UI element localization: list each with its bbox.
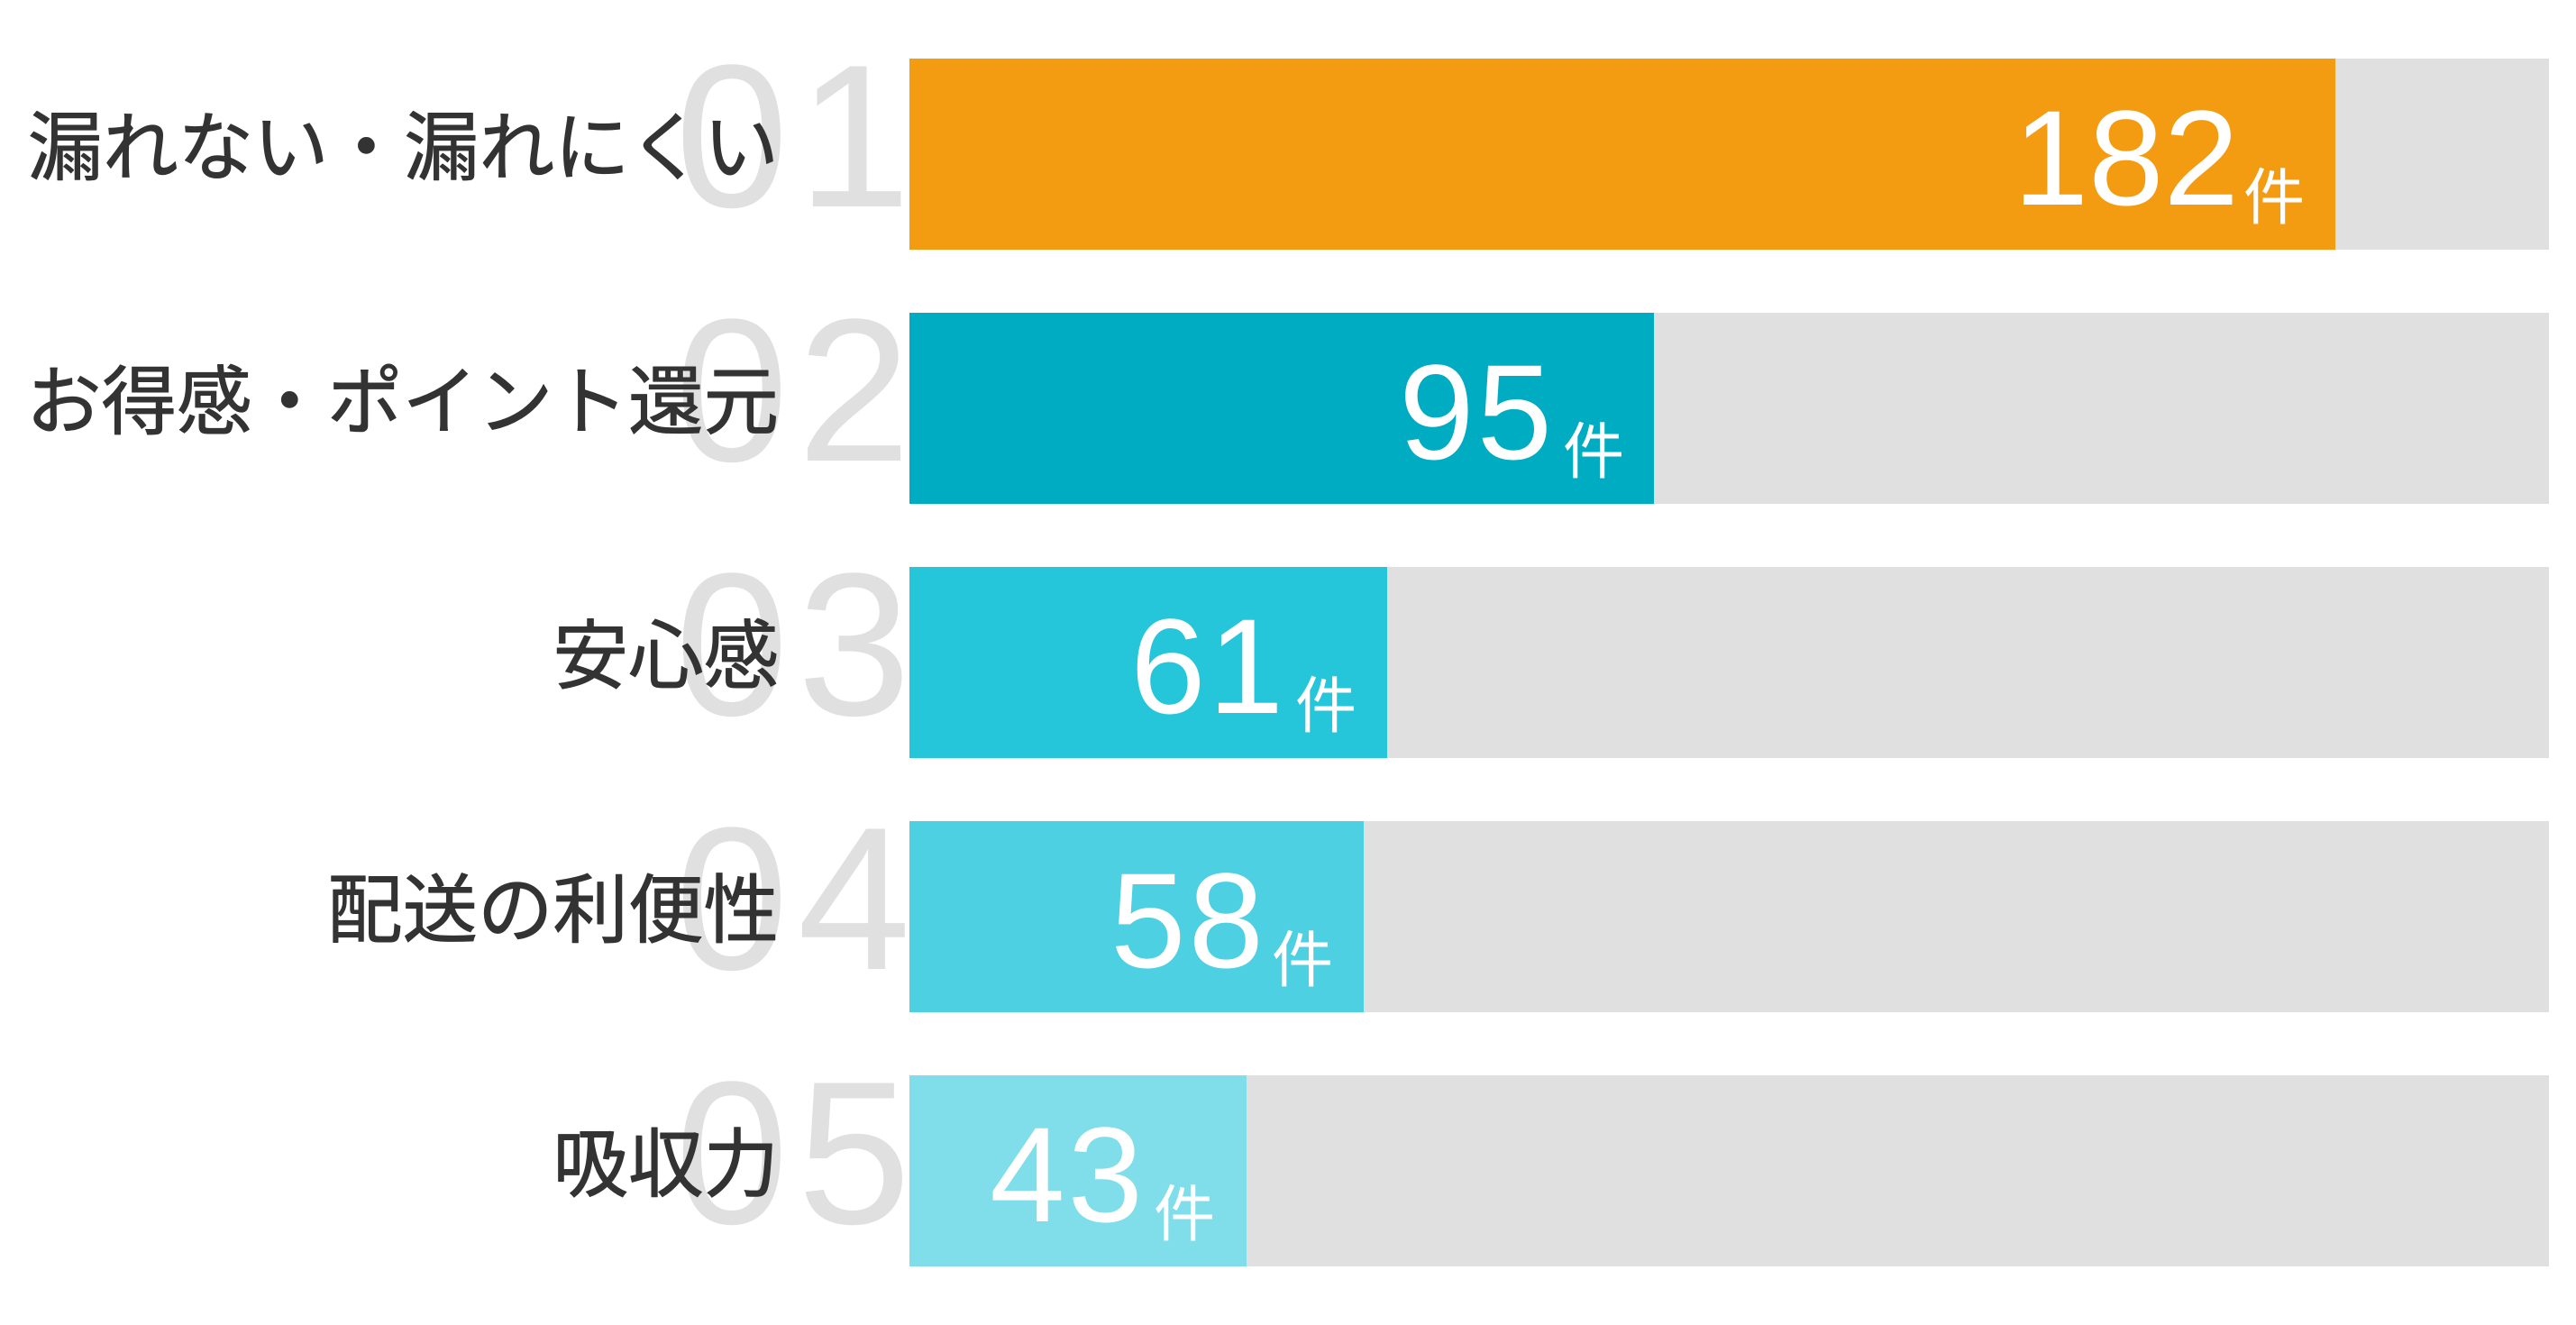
unit 01: 件 bbox=[2243, 164, 2305, 233]
rank number 02: 02 bbox=[675, 276, 919, 504]
rank number 01: 01 bbox=[675, 22, 919, 250]
bar 01 bbox=[909, 59, 2335, 250]
label 05: 吸収力 bbox=[553, 1122, 779, 1207]
row 05 bbox=[553, 1038, 2549, 1266]
label 03: 安心感 bbox=[553, 614, 779, 699]
label 01: 漏れない・漏れにくい bbox=[28, 105, 779, 190]
bar 04 bbox=[909, 821, 1364, 1012]
track 03 bbox=[909, 567, 2549, 758]
track 05 bbox=[909, 1075, 2549, 1266]
rank number 05: 05 bbox=[675, 1038, 919, 1266]
unit 03: 件 bbox=[1295, 672, 1357, 741]
value 03: 61 bbox=[1130, 590, 1286, 742]
rank number 04: 04 bbox=[675, 784, 919, 1012]
row 03 bbox=[553, 530, 2549, 758]
row 01 bbox=[28, 22, 2549, 250]
value 01: 182 bbox=[2014, 82, 2239, 233]
value 02: 95 bbox=[1399, 336, 1555, 488]
bar 03 bbox=[909, 567, 1387, 758]
label 04: 配送の利便性 bbox=[327, 868, 779, 953]
label 02: お得感・ポイント還元 bbox=[26, 360, 779, 444]
bar 05 bbox=[909, 1075, 1247, 1266]
row 04 bbox=[327, 784, 2549, 1012]
rank number 03: 03 bbox=[675, 530, 919, 758]
track 02 bbox=[909, 313, 2549, 504]
unit 02: 件 bbox=[1563, 418, 1624, 487]
value 04: 58 bbox=[1110, 845, 1266, 996]
unit 05: 件 bbox=[1154, 1181, 1215, 1249]
bar 02 bbox=[909, 313, 1654, 504]
unit 04: 件 bbox=[1272, 927, 1333, 995]
row 02 bbox=[26, 276, 2549, 504]
value 05: 43 bbox=[990, 1099, 1146, 1250]
track 01 bbox=[909, 59, 2549, 250]
track 04 bbox=[909, 821, 2549, 1012]
